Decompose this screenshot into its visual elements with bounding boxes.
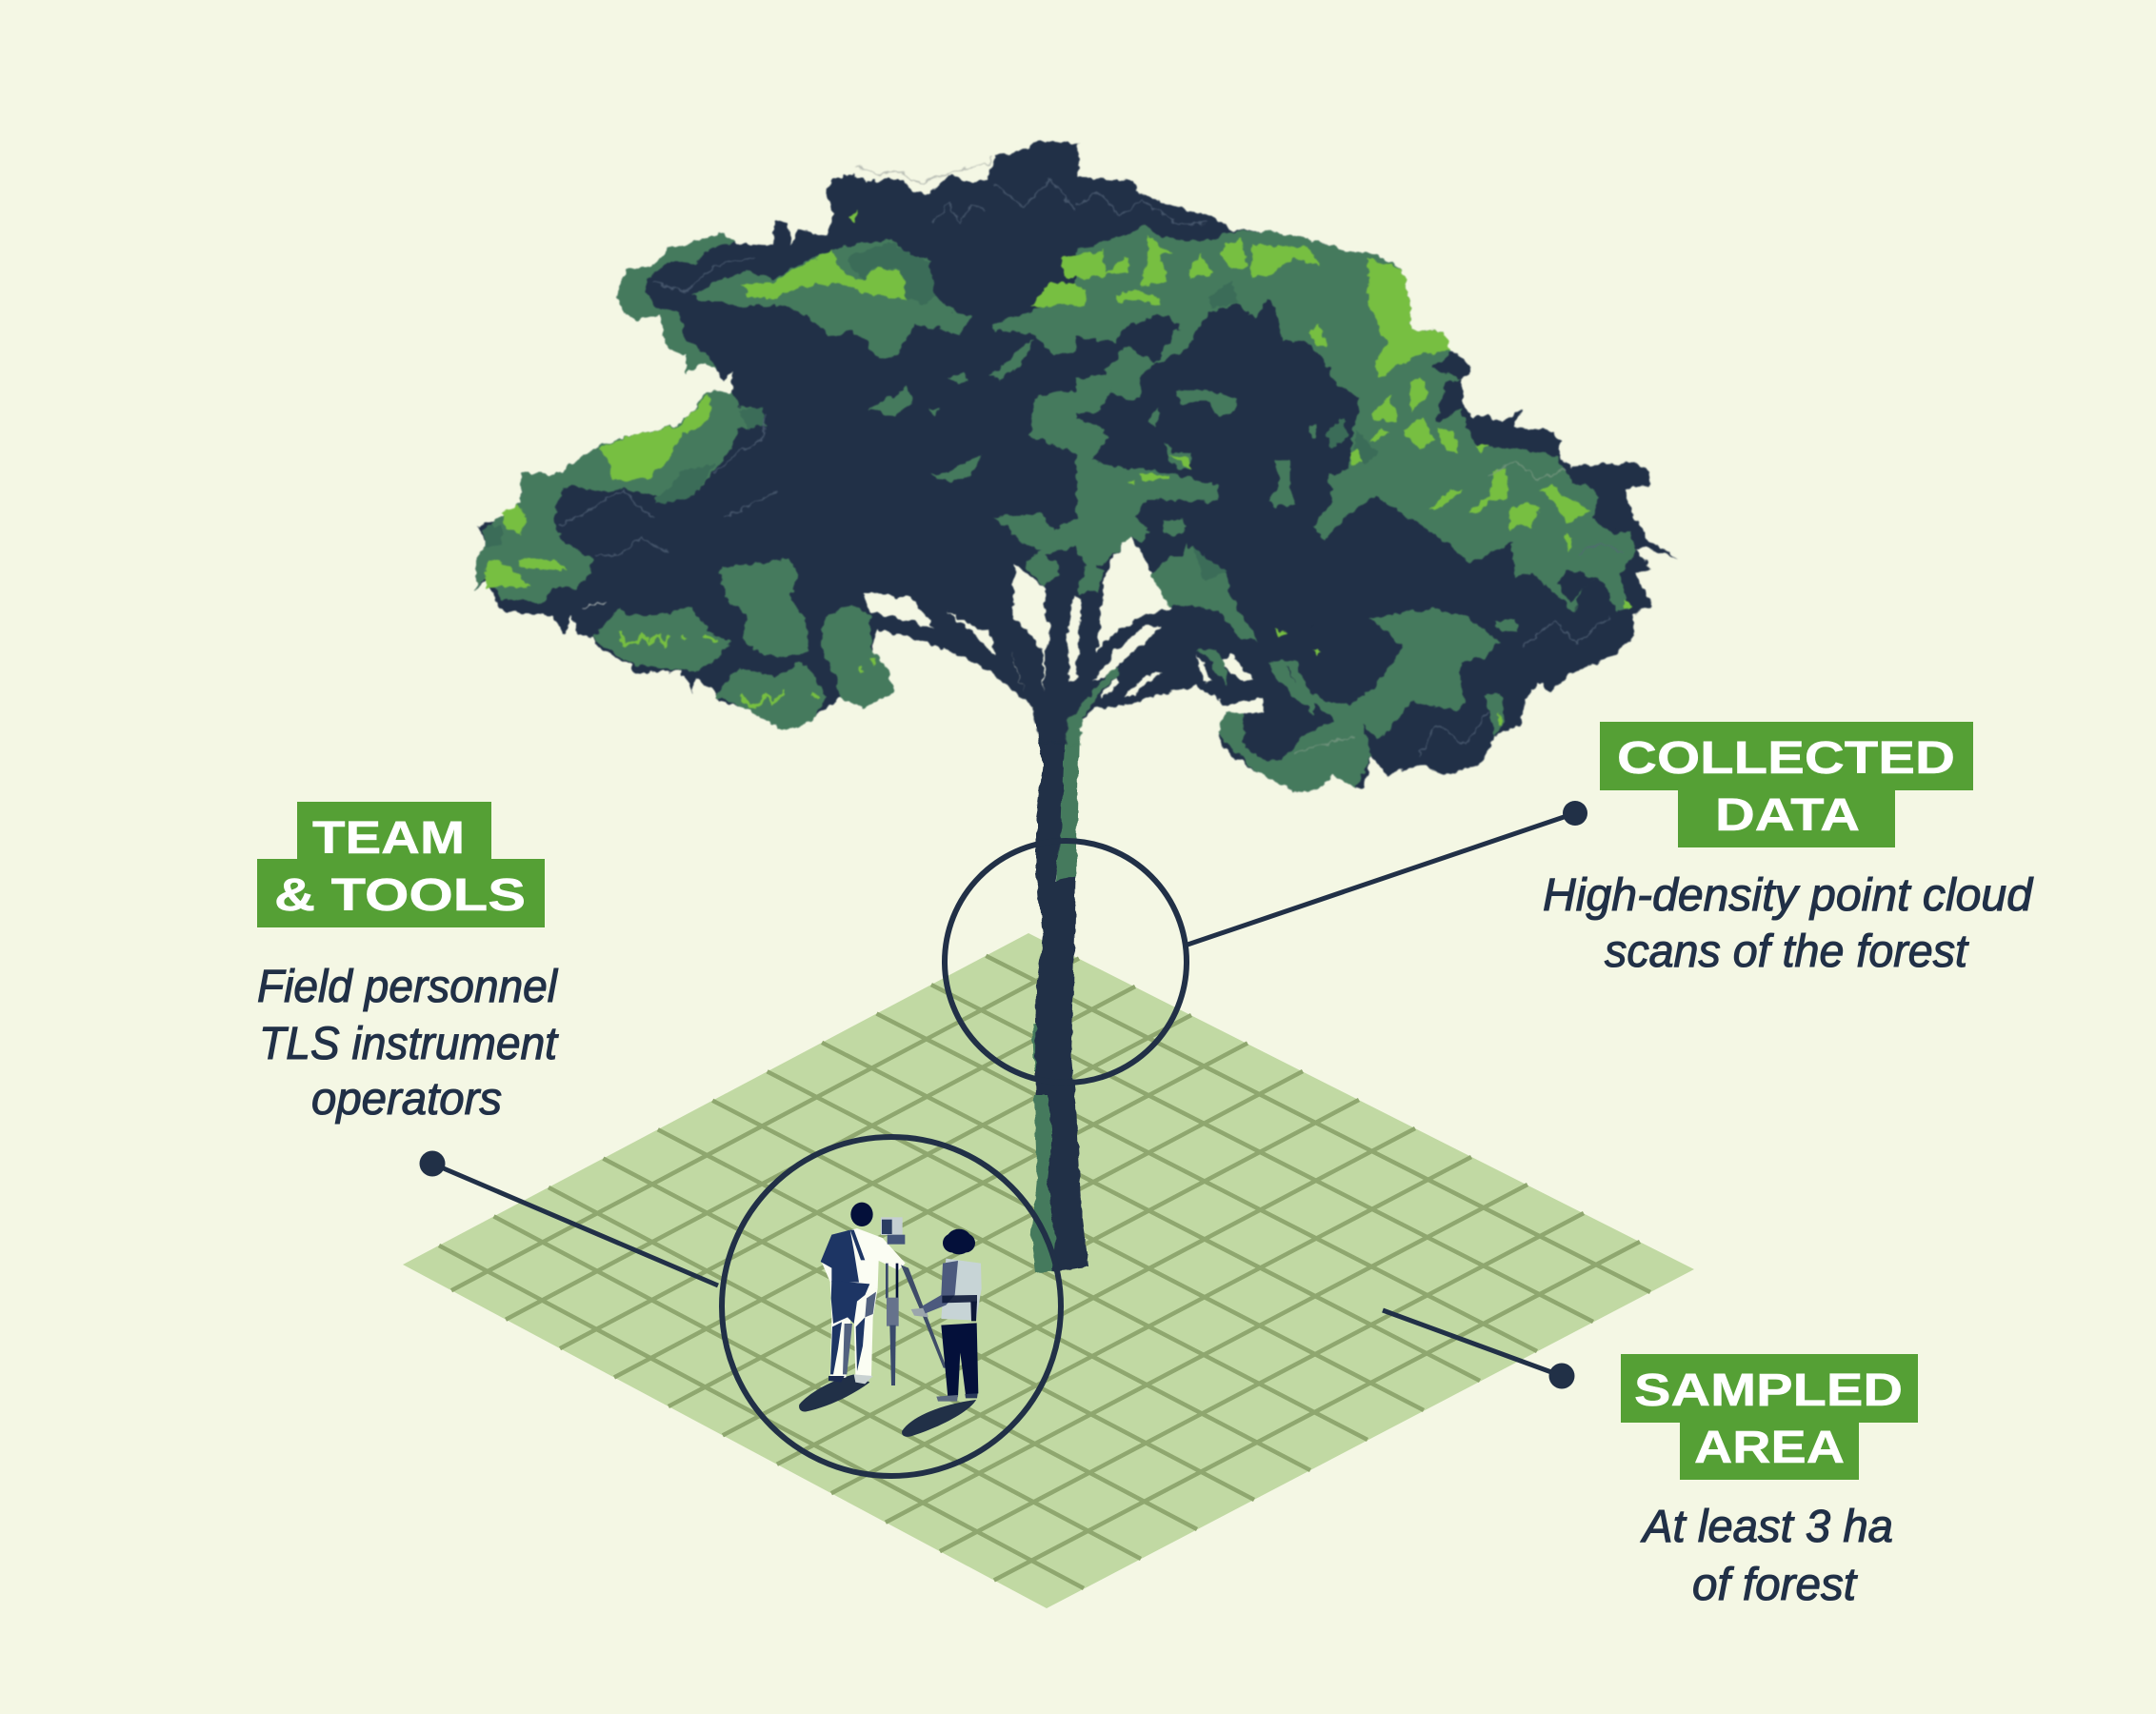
text: collected data description: High-density point cloud [1543,870,2033,921]
green foliage around branch fork [993,514,1314,714]
heading: team and tools [257,802,545,927]
tree crown and branches [476,140,1677,790]
branches with gaps [838,514,1314,745]
left foliage bright green [484,211,1079,588]
heading: collected data [1600,722,1973,847]
callout: sampled area leader [1383,1310,1575,1388]
text: team and tools description: TLS instrument [259,1019,559,1069]
TLS instrument on tripod [881,1217,947,1385]
crown left half [476,140,1079,727]
surveyor [821,1203,906,1384]
text: team and tools description: Field personnel [257,962,558,1012]
right foliage darker green [1192,282,1379,581]
right foliage mid green [1076,224,1636,790]
text: collected data description: scans of the forest [1605,927,1969,977]
left canopy texture lines [560,156,1076,608]
right foliage bright green [1076,235,1630,726]
heading: sampled area [1621,1354,1918,1480]
crown right half [1076,177,1677,790]
small darker patch [1190,559,1226,579]
text: sampled area description [1640,1502,1893,1610]
team and instrument figures [799,1203,982,1437]
callout: collected data circle and leader [945,801,1587,1083]
right foliage dark pockets [1436,379,1632,605]
assistant [922,1229,982,1402]
tree trunk [1031,709,1088,1272]
sampled area ground grid [403,933,1694,1608]
heading: sampled area: SAMPLED [1634,1365,1903,1416]
shadows [799,1374,976,1437]
callout: team circle and leader [419,1137,1061,1476]
left foliage bright squiggles [620,630,875,707]
text: collected data description [1543,870,2033,977]
text: team and tools description [257,962,559,1125]
text: team and tools description: operators [311,1074,502,1125]
left foliage darker green [482,242,935,548]
left foliage mid green [476,232,1079,727]
heading: collected data: COLLECTED [1617,733,1955,784]
heading: sampled area: AREA [1694,1423,1845,1473]
heading: team and tools: & TOOLS [274,870,526,921]
text: sampled area description: At least 3 ha [1640,1502,1893,1552]
text: sampled area description: of forest [1692,1560,1858,1610]
trunk green arm [1065,667,1119,745]
right canopy texture lines [1076,192,1625,756]
heading: collected data: DATA [1715,790,1860,841]
heading: team and tools: TEAM [312,813,465,864]
right foliage [1076,192,1636,790]
